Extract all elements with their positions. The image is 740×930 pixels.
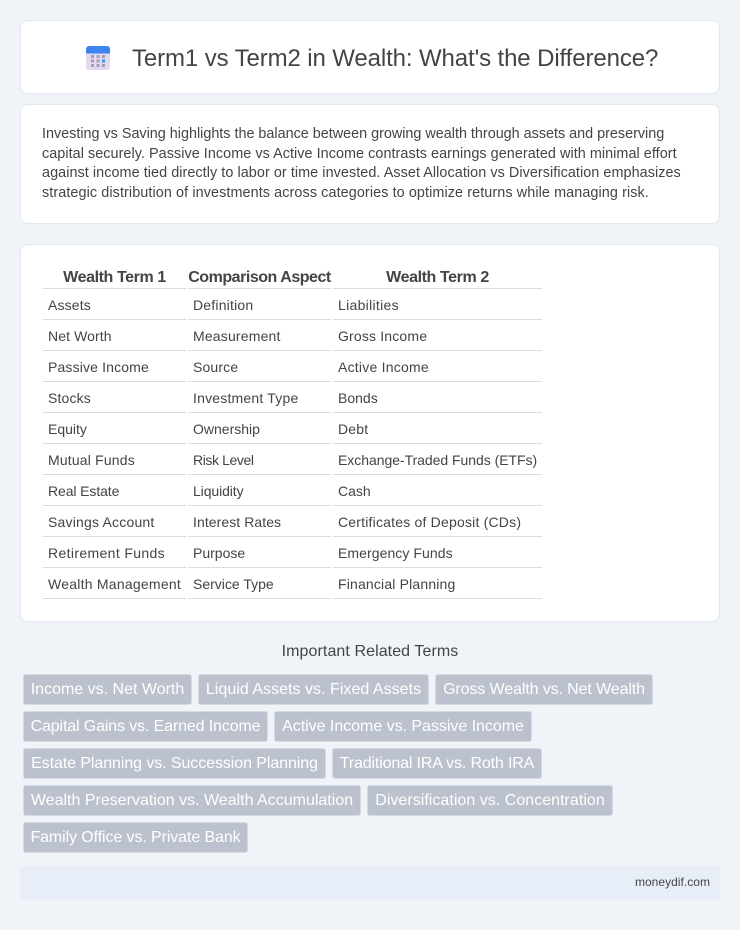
related term tags: Gross Wealth vs. Net Wealth bbox=[443, 681, 645, 698]
footer bar bbox=[20, 866, 720, 900]
table rows: Net Worth bbox=[48, 328, 112, 344]
table rows: Debt bbox=[338, 421, 368, 437]
icon: calendar bbox=[86, 46, 110, 70]
table rows: Mutual Funds bbox=[48, 452, 135, 468]
table rows: Measurement bbox=[193, 328, 281, 344]
header panel bbox=[20, 20, 720, 94]
table rows: Purpose bbox=[193, 545, 245, 561]
table rows: Assets bbox=[48, 297, 91, 313]
table header: Wealth Term 1 bbox=[63, 269, 166, 286]
table rows: Wealth Management bbox=[48, 576, 181, 592]
related term tags: Capital Gains vs. Earned Income bbox=[31, 718, 260, 735]
table header: Comparison Aspect bbox=[188, 269, 331, 286]
table header: Wealth Term 2 bbox=[386, 269, 489, 286]
related term tags: Active Income vs. Passive Income bbox=[282, 718, 524, 735]
intro paragraph: strategic distribution of investments across categories to optimize returns while managing risk. bbox=[42, 185, 649, 201]
table rows: Financial Planning bbox=[338, 576, 455, 592]
title: Term1 vs Term2 in Wealth: What's the Difference? bbox=[132, 45, 658, 72]
table rows: Retirement Funds bbox=[48, 545, 165, 561]
table rows: Passive Income bbox=[48, 359, 149, 375]
table panel bbox=[20, 244, 720, 622]
footer source text: moneydif.com bbox=[635, 875, 710, 889]
table rows: Liquidity bbox=[193, 483, 243, 499]
table rows: Source bbox=[193, 359, 238, 375]
table rows: Risk Level bbox=[193, 452, 254, 468]
related term tags: Family Office vs. Private Bank bbox=[30, 829, 241, 846]
table rows: Savings Account bbox=[48, 514, 155, 530]
table rows: Exchange-Traded Funds (ETFs) bbox=[338, 452, 537, 468]
table rows bbox=[43, 297, 542, 599]
table rows: Gross Income bbox=[338, 328, 427, 344]
table rows: Stocks bbox=[48, 390, 91, 406]
related term tags: Liquid Assets vs. Fixed Assets bbox=[206, 681, 421, 698]
related term tags: Traditional IRA vs. Roth IRA bbox=[340, 755, 534, 772]
intro text panel bbox=[20, 104, 720, 224]
table rows: Definition bbox=[193, 297, 253, 313]
table rows: Ownership bbox=[193, 421, 260, 437]
table rows: Certificates of Deposit (CDs) bbox=[338, 514, 521, 530]
table header bbox=[43, 269, 542, 289]
intro paragraph: Investing vs Saving highlights the balance between growing wealth through assets and preserving bbox=[42, 126, 664, 142]
related term tags: Income vs. Net Worth bbox=[31, 681, 184, 698]
table rows: Cash bbox=[338, 483, 371, 499]
comparison table bbox=[43, 269, 542, 599]
table rows: Service Type bbox=[193, 576, 274, 592]
table rows: Real Estate bbox=[48, 483, 119, 499]
related term tags: Estate Planning vs. Succession Planning bbox=[31, 755, 318, 772]
table rows: Investment Type bbox=[193, 390, 298, 406]
intro paragraph bbox=[42, 126, 681, 201]
table rows: Equity bbox=[48, 421, 87, 437]
related term tags: Wealth Preservation vs. Wealth Accumulation bbox=[31, 792, 353, 809]
intro paragraph: against income tied directly to labor or time invested. Asset Allocation vs Diversification emphasizes bbox=[42, 165, 681, 181]
table rows: Bonds bbox=[338, 390, 378, 406]
table rows: Interest Rates bbox=[193, 514, 281, 530]
intro paragraph: capital securely. Passive Income vs Active Income contrasts earnings generated with minimal effort bbox=[42, 146, 677, 162]
related terms heading: Important Related Terms bbox=[282, 643, 458, 660]
related term tags: Diversification vs. Concentration bbox=[375, 792, 605, 809]
table rows: Emergency Funds bbox=[338, 545, 453, 561]
table rows: Active Income bbox=[338, 359, 429, 375]
table rows: Liabilities bbox=[338, 297, 399, 313]
